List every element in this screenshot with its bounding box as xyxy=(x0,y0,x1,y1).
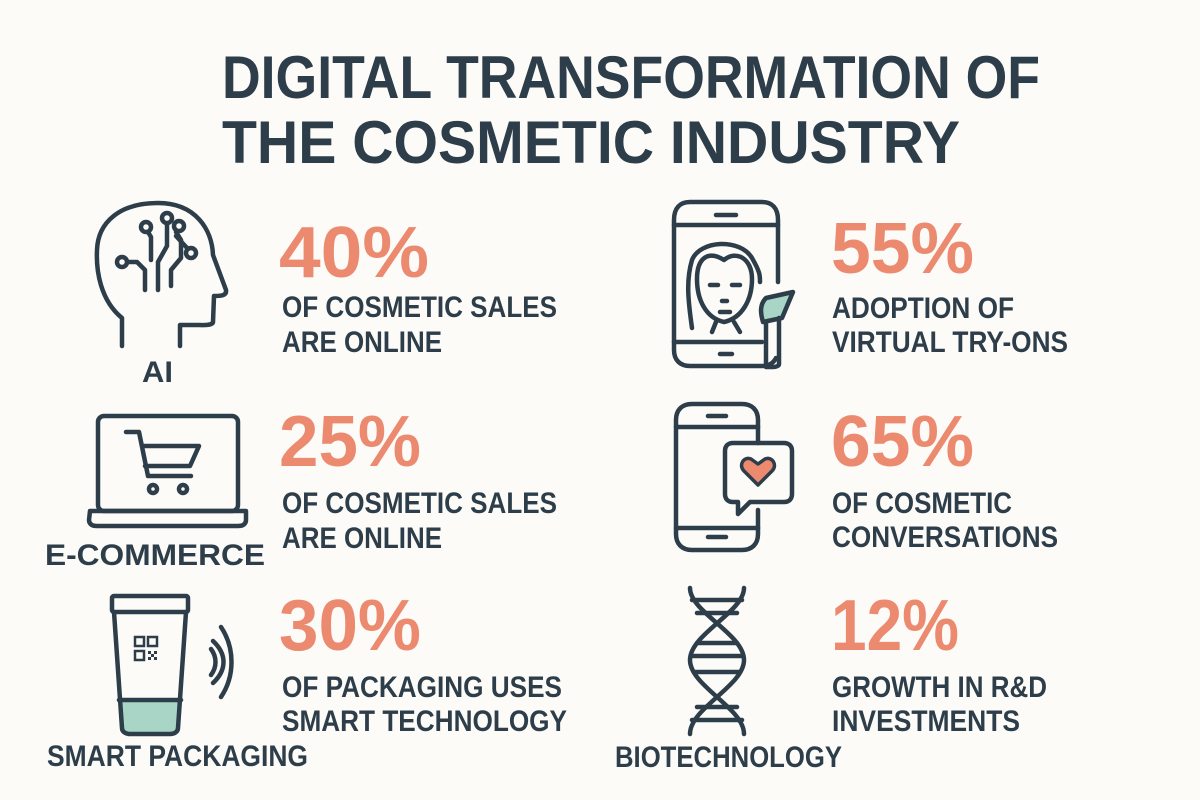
description: OF PACKAGING USES xyxy=(282,671,562,704)
icon: phone with face and brush xyxy=(674,202,793,367)
stat 30%: 30% xyxy=(279,586,421,666)
panel: AI: ARE ONLINE xyxy=(282,326,442,359)
label: BIOTECHNOLOGY: BIOTECHNOLOGY xyxy=(615,741,842,774)
icon: DNA helix xyxy=(690,588,744,734)
panel: Social conversations xyxy=(676,402,1058,554)
panel: Social conversations: CONVERSATIONS xyxy=(832,521,1058,554)
icon: phone with heart bubble xyxy=(676,404,792,550)
stat 65%: 65% xyxy=(831,402,974,482)
stat 40%: 40% xyxy=(279,213,429,293)
description: ADOPTION OF xyxy=(832,292,1014,325)
title: DIGITAL TRANSFORMATION OF xyxy=(222,44,1040,111)
title: THE COSMETIC INDUSTRY xyxy=(222,109,960,176)
panel: Biotechnology: INVESTMENTS xyxy=(832,705,1020,738)
description: OF COSMETIC SALES xyxy=(282,291,557,324)
panel: Smart packaging xyxy=(47,586,567,773)
title xyxy=(222,44,1040,176)
label: AI: AI xyxy=(142,356,173,389)
panel: E-commerce: ARE ONLINE xyxy=(282,522,442,555)
description: OF COSMETIC xyxy=(832,487,1012,520)
icon: AI head xyxy=(97,203,226,346)
description: OF COSMETIC SALES xyxy=(282,487,557,520)
panel: E-commerce xyxy=(45,402,557,572)
panel: AI xyxy=(97,203,557,389)
panel: Virtual try-ons: VIRTUAL TRY-ONS xyxy=(832,326,1068,359)
stat 55%: 55% xyxy=(831,209,974,289)
label: E-COMMERCE: E-COMMERCE xyxy=(45,539,265,572)
description: GROWTH IN R&D xyxy=(832,671,1047,704)
label: SMART PACKAGING: SMART PACKAGING xyxy=(47,740,308,773)
stat 12%: 12% xyxy=(831,586,959,666)
stat 25%: 25% xyxy=(279,402,421,482)
panel: Smart packaging: SMART TECHNOLOGY xyxy=(282,705,567,738)
panel: Biotechnology xyxy=(615,586,1047,774)
icon: laptop with cart xyxy=(89,416,246,526)
panel: Virtual try-ons xyxy=(674,202,1068,367)
icon: smart tube xyxy=(112,596,232,734)
